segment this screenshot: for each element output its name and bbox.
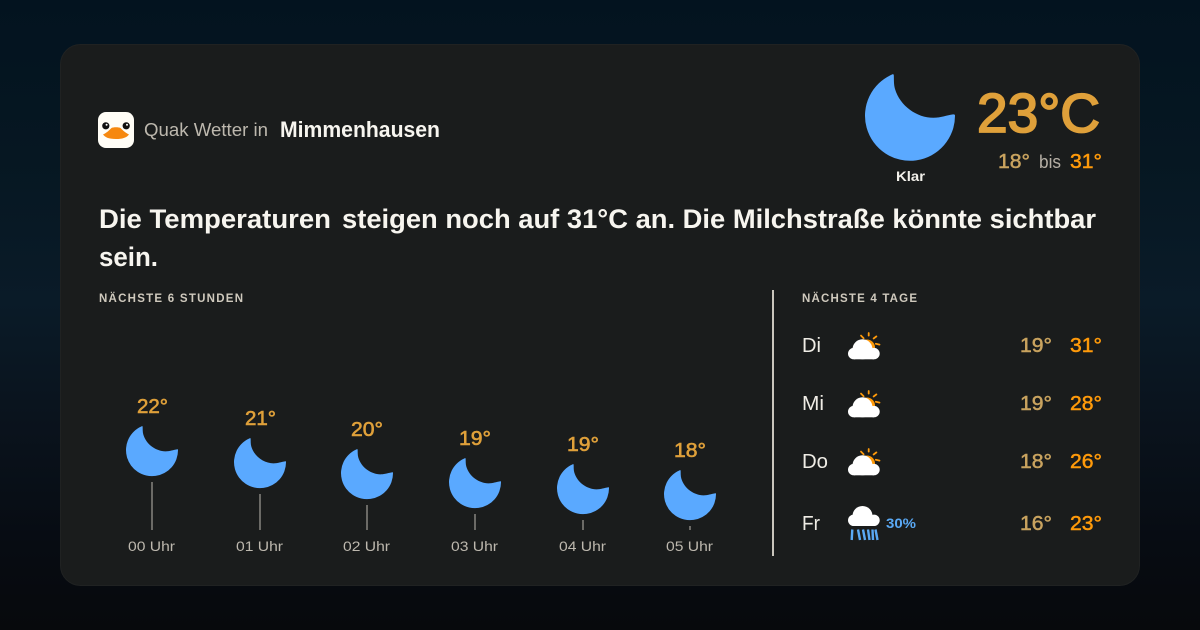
heading: forecast summary [99, 204, 1096, 272]
hour 03: 19° [459, 428, 491, 450]
hour 04 [557, 434, 609, 554]
text: today's range: bis [1039, 152, 1061, 172]
day: Wednesday: 28° [1070, 393, 1102, 415]
hour 01 [234, 408, 286, 554]
text: today's range: 31° [1070, 151, 1102, 173]
heading: next 6 hours: NÄCHSTE 6 STUNDEN [99, 292, 243, 305]
day: Friday: 23° [1070, 513, 1102, 535]
hour 03 [449, 428, 501, 554]
day: Friday: Fr [802, 513, 820, 535]
text: rain probability: 30% [886, 515, 917, 531]
text: app name: Quak Wetter in [144, 120, 268, 140]
day: Wednesday [802, 391, 1102, 417]
day: Tuesday: 31° [1070, 335, 1102, 357]
day: Wednesday: Mi [802, 393, 824, 415]
panel: weather card [60, 44, 1140, 586]
heading: next 4 days: NÄCHSTE 4 TAGE [802, 292, 917, 305]
hour 05: 05 Uhr [666, 538, 713, 554]
day: Tuesday [802, 333, 1102, 359]
hour 00: 22° [137, 396, 168, 418]
heading: forecast summary: sein. [99, 242, 158, 272]
day: Friday [802, 506, 1102, 540]
heading: forecast summary: Die Temperaturen [99, 204, 331, 234]
hour 02 [341, 419, 393, 554]
hour 02: 20° [351, 419, 383, 441]
icon: duck logo [98, 112, 134, 148]
day: Thursday: 26° [1070, 451, 1102, 473]
text: today's range [998, 151, 1102, 173]
hour 02: 02 Uhr [343, 538, 390, 554]
day: Thursday: 18° [1020, 451, 1052, 473]
hour 00: 00 Uhr [128, 538, 175, 554]
hour 01: 21° [245, 408, 276, 430]
list: daily forecast [802, 333, 1102, 540]
hour 01: 01 Uhr [236, 538, 283, 554]
day: Thursday [802, 449, 1102, 475]
hour 04: 19° [567, 434, 599, 456]
day: Tuesday: 19° [1020, 335, 1052, 357]
day: Thursday: Do [802, 451, 828, 473]
icon: current moon [865, 74, 955, 161]
hour 04: 04 Uhr [559, 538, 606, 554]
icon: rain cloud [848, 506, 880, 540]
day: Wednesday: 19° [1020, 393, 1052, 415]
heading: forecast summary: steigen noch auf 31°C an. Die Milchstraße könnte sichtbar [342, 204, 1096, 234]
day: Friday: 16° [1020, 513, 1052, 535]
text: location: Mimmenhausen [280, 117, 440, 142]
text: today's range: 18° [998, 151, 1030, 173]
hour 03: 03 Uhr [451, 538, 498, 554]
text: current temperature: 23°C [977, 82, 1100, 144]
day: Tuesday: Di [802, 335, 821, 357]
text: condition: Klar [896, 168, 926, 184]
hour 00 [126, 396, 178, 554]
chart: hourly forecast [126, 396, 716, 554]
hour 05 [664, 440, 716, 554]
hour 05: 18° [674, 440, 706, 462]
